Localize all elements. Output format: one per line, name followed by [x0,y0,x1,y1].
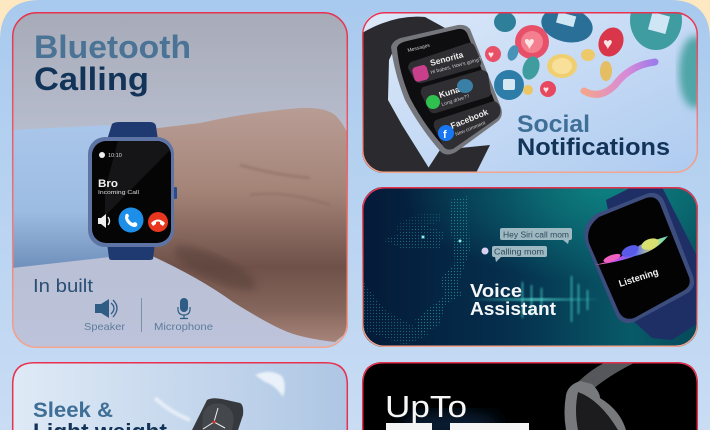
straps [606,187,700,340]
heading: assistant: Assistant [470,298,556,319]
heading: sleek: Sleek & [33,399,113,422]
shirt sleeve [12,125,110,268]
panel: bluetooth calling [12,12,350,348]
label: microphone: Microphone [154,321,213,333]
divider [141,298,142,332]
screen [588,197,690,319]
heading: upto: UpTo [385,389,467,424]
watch on wrist: 10:10 [108,153,122,159]
panel: voice assistant [362,187,700,347]
speaker glyph on screen [98,214,106,228]
hand and wrist [150,108,350,342]
reaction icons: ♥ [543,85,549,96]
heading: notifications: Notifications [517,134,670,161]
text: in built: In built [33,276,93,296]
icon: microphone [178,298,190,318]
panel: upto battery [362,362,698,430]
watch side view [564,363,634,430]
watch on wrist: Incoming Call [98,190,139,196]
blue watch listening: Listening [618,267,660,290]
panel: social notifications [362,0,710,173]
black smartwatch with notifications: Messages [407,42,431,54]
case [391,25,502,155]
notification cards: New comment [455,120,487,138]
case [584,193,694,323]
heading: calling: Calling [34,61,149,97]
watch on wrist: Bro [98,178,118,190]
siri wave [595,236,668,265]
handset glyph [125,214,137,227]
black smartwatch with notifications [362,17,502,173]
strap [362,17,445,173]
voice waveform [470,276,600,322]
notification cards: Facebook [449,107,490,131]
speech bubble: calling mom: Calling mom [494,248,544,256]
reaction icons: ♥ [603,36,612,53]
icon: speaker [95,299,117,318]
notification cards: Hi babes, How's going? [430,57,482,76]
blue watch listening [584,187,700,340]
notification cards: Senorita [429,49,465,68]
label: speaker: Speaker [84,321,126,333]
heading: bluetooth: Bluetooth [34,29,191,65]
reaction icons: ♥ [524,33,535,53]
feather [255,372,285,397]
heading: voice: Voice [470,280,522,301]
panel: sleek and light weight [12,362,348,430]
large number blocks [386,423,432,430]
speech bubble: hey siri: Hey Siri call mom [503,230,569,240]
dotted face [362,196,470,345]
watch on wrist [88,122,177,260]
notification cards [408,43,500,150]
reaction icons: ♥ [488,50,494,61]
speech bubble: hey siri [500,228,572,244]
glow [400,411,500,430]
notification cards: Kunal [438,83,463,100]
heading: social: Social [517,111,590,138]
speech bubble: calling mom [482,246,547,262]
notification cards: f [443,129,447,141]
notification cards: Long drive?? [441,94,470,108]
reaction icons [485,12,697,113]
black watch [192,398,243,430]
